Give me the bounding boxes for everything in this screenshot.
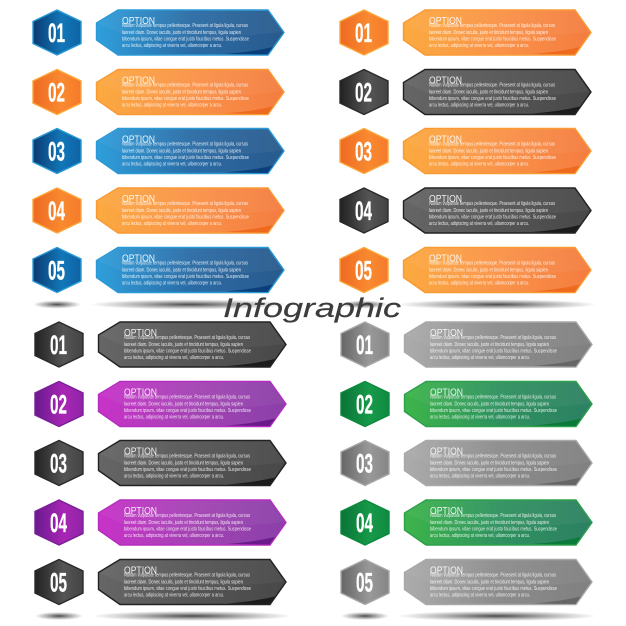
banner 04: Nullam vulputate tempus pellentesque. Praesent at ligula ligula, cursus: [429, 201, 555, 207]
option row: left 01 blue: [33, 10, 284, 55]
banner 04: laoreet diam. Donec iaculis, justo et tincidunt tempus, ligula sapien: [429, 208, 548, 214]
banner 04: [96, 188, 284, 233]
banner 02: OPTION: [429, 74, 462, 86]
banner 05: OPTION: [430, 564, 463, 576]
number badge 05: 05: [50, 568, 67, 598]
banner 03: Nullam vulputate tempus pellentesque. Praesent at ligula ligula, cursus: [429, 142, 555, 148]
shadow: bottom right number: [341, 612, 389, 620]
banner 05: bibendum ipsum, vitae congue erat justo faucibus metus. Suspendisse: [122, 274, 249, 280]
number badge 05: 05: [356, 568, 373, 598]
banner 02: arcu lectus, adipiscing at viverra vel, ullamcorper a arcu.: [124, 414, 224, 420]
number badge 04: [35, 500, 83, 545]
banner 04: arcu lectus, adipiscing at viverra vel, ullamcorper a arcu.: [122, 221, 222, 227]
number badge 03: [33, 128, 81, 174]
banner 02: [98, 382, 286, 426]
shadow: top left number: [33, 300, 81, 308]
banner 01: [98, 322, 286, 367]
banner 03: laoreet diam. Donec iaculis, justo et tincidunt tempus, ligula sapien: [430, 460, 549, 466]
title: Infographic: [223, 293, 402, 323]
banner 05: bibendum ipsum, vitae congue erat justo faucibus metus. Suspendisse: [429, 274, 556, 280]
banner 04: laoreet diam. Donec iaculis, justo et tincidunt tempus, ligula sapien: [122, 208, 241, 214]
banner 05: OPTION: [429, 252, 462, 264]
banner 04: bibendum ipsum, vitae congue erat justo faucibus metus. Suspendisse: [429, 214, 556, 220]
number badge 04: 04: [355, 196, 372, 226]
banner 01: OPTION: [124, 327, 157, 339]
banner 04: [404, 188, 591, 233]
banner 04: OPTION: [429, 193, 462, 205]
banner 01: [96, 10, 284, 55]
banner 03: [404, 440, 592, 486]
banner 01: Nullam vulputate tempus pellentesque. Praesent at ligula ligula, cursus: [429, 23, 555, 29]
banner 03: laoreet diam. Donec iaculis, justo et tincidunt tempus, ligula sapien: [122, 148, 241, 154]
option row: right 05 orange: [340, 248, 591, 292]
banner 04: bibendum ipsum, vitae congue erat justo faucibus metus. Suspendisse: [430, 526, 557, 532]
banner 02: [404, 382, 592, 426]
banner 01: bibendum ipsum, vitae congue erat justo faucibus metus. Suspendisse: [430, 348, 557, 354]
option row: lower left 05 dark: [35, 560, 286, 604]
banner 02: OPTION: [430, 386, 463, 398]
option row: left 02 orange: [33, 70, 284, 114]
banner 02: bibendum ipsum, vitae congue erat justo faucibus metus. Suspendisse: [430, 408, 557, 414]
banner 02: Nullam vulputate tempus pellentesque. Praesent at ligula ligula, cursus: [124, 394, 250, 400]
banner 03: [404, 128, 591, 174]
option row: lower left 04 purple: [35, 500, 286, 545]
banner 05: Nullam vulputate tempus pellentesque. Praesent at ligula ligula, cursus: [122, 260, 248, 266]
banner 01: bibendum ipsum, vitae congue erat justo faucibus metus. Suspendisse: [124, 348, 251, 354]
banner 05: arcu lectus, adipiscing at viverra vel, ullamcorper a arcu.: [122, 280, 222, 286]
banner 03: [96, 128, 284, 174]
number badge 03: [340, 128, 388, 174]
option row: lower right 02 green: [341, 382, 592, 426]
banner 05: laoreet diam. Donec iaculis, justo et tincidunt tempus, ligula sapien: [429, 268, 548, 274]
banner 03: Nullam vulputate tempus pellentesque. Praesent at ligula ligula, cursus: [124, 454, 250, 460]
banner 04: arcu lectus, adipiscing at viverra vel, ullamcorper a arcu.: [429, 221, 529, 227]
banner 04: OPTION: [430, 505, 463, 517]
banner 05: OPTION: [124, 564, 157, 576]
banner 01: Nullam vulputate tempus pellentesque. Praesent at ligula ligula, cursus: [430, 335, 556, 341]
number badge 03: [341, 440, 389, 486]
number badge 02: 02: [50, 390, 67, 420]
banner 01: arcu lectus, adipiscing at viverra vel, ullamcorper a arcu.: [122, 43, 222, 49]
banner 02: bibendum ipsum, vitae congue erat justo faucibus metus. Suspendisse: [429, 96, 556, 102]
banner 05: arcu lectus, adipiscing at viverra vel, ullamcorper a arcu.: [124, 592, 224, 598]
banner 02: Nullam vulputate tempus pellentesque. Praesent at ligula ligula, cursus: [430, 394, 556, 400]
banner 05: bibendum ipsum, vitae congue erat justo faucibus metus. Suspendisse: [430, 586, 557, 592]
option row: lower right 01 grey: [341, 322, 592, 367]
banner 01: Nullam vulputate tempus pellentesque. Praesent at ligula ligula, cursus: [122, 23, 248, 29]
number badge 01: 01: [48, 18, 65, 48]
banner 05: Nullam vulputate tempus pellentesque. Praesent at ligula ligula, cursus: [430, 572, 556, 578]
shadow: bottom right banner: [397, 611, 597, 621]
option row: lower right 05 grey: [341, 560, 592, 604]
banner 03: arcu lectus, adipiscing at viverra vel, ullamcorper a arcu.: [122, 162, 222, 168]
banner 05: bibendum ipsum, vitae congue erat justo faucibus metus. Suspendisse: [124, 586, 251, 592]
banner 04: arcu lectus, adipiscing at viverra vel, ullamcorper a arcu.: [430, 533, 530, 539]
banner 02: OPTION: [122, 74, 155, 86]
banner 03: OPTION: [122, 134, 155, 146]
option row: lower left 01 dark: [35, 322, 286, 367]
banner 02: bibendum ipsum, vitae congue erat justo faucibus metus. Suspendisse: [124, 408, 251, 414]
number badge 04: 04: [50, 508, 67, 538]
option row: lower left 03 dark: [35, 440, 286, 486]
banner 05: [404, 560, 592, 604]
banner 04: arcu lectus, adipiscing at viverra vel, ullamcorper a arcu.: [124, 533, 224, 539]
banner 04: Nullam vulputate tempus pellentesque. Praesent at ligula ligula, cursus: [124, 513, 250, 519]
number badge 01: 01: [355, 18, 372, 48]
banner 01: arcu lectus, adipiscing at viverra vel, ullamcorper a arcu.: [429, 43, 529, 49]
number badge 05: [35, 560, 83, 604]
option row: left 04 orange: [33, 188, 284, 233]
banner 01: laoreet diam. Donec iaculis, justo et tincidunt tempus, ligula sapien: [429, 30, 548, 36]
banner 03: arcu lectus, adipiscing at viverra vel, ullamcorper a arcu.: [430, 474, 530, 480]
banner 05: Nullam vulputate tempus pellentesque. Praesent at ligula ligula, cursus: [429, 260, 555, 266]
banner 04: laoreet diam. Donec iaculis, justo et tincidunt tempus, ligula sapien: [430, 520, 549, 526]
banner 01: OPTION: [430, 327, 463, 339]
number badge 02: 02: [355, 78, 372, 108]
shadow: top right number: [340, 300, 388, 308]
number badge 01: 01: [50, 330, 67, 360]
banner 01: laoreet diam. Donec iaculis, justo et tincidunt tempus, ligula sapien: [430, 342, 549, 348]
number badge 05: 05: [355, 256, 372, 286]
banner 05: arcu lectus, adipiscing at viverra vel, ullamcorper a arcu.: [429, 280, 529, 286]
banner 04: [98, 500, 286, 545]
banner 02: [96, 70, 284, 114]
banner 02: laoreet diam. Donec iaculis, justo et tincidunt tempus, ligula sapien: [122, 90, 241, 96]
banner 02: OPTION: [124, 386, 157, 398]
banner 02: laoreet diam. Donec iaculis, justo et tincidunt tempus, ligula sapien: [429, 90, 548, 96]
banner 03: OPTION: [429, 134, 462, 146]
banner 04: Nullam vulputate tempus pellentesque. Praesent at ligula ligula, cursus: [430, 513, 556, 519]
banner 02: [404, 70, 591, 114]
banner 05: OPTION: [122, 252, 155, 264]
number badge 04: 04: [356, 508, 373, 538]
number badge 01: [341, 322, 389, 367]
banner 05: [96, 248, 284, 292]
banner 02: Nullam vulputate tempus pellentesque. Praesent at ligula ligula, cursus: [122, 82, 248, 88]
option row: lower right 04 green: [341, 500, 592, 545]
banner 04: bibendum ipsum, vitae congue erat justo faucibus metus. Suspendisse: [122, 214, 249, 220]
banner 03: laoreet diam. Donec iaculis, justo et tincidunt tempus, ligula sapien: [429, 148, 548, 154]
banner 01: Nullam vulputate tempus pellentesque. Praesent at ligula ligula, cursus: [124, 335, 250, 341]
banner 03: arcu lectus, adipiscing at viverra vel, ullamcorper a arcu.: [429, 162, 529, 168]
banner 05: [98, 560, 286, 604]
option row: right 02 dark: [340, 70, 591, 114]
number badge 03: 03: [355, 136, 372, 166]
option row: left 05 blue: [33, 248, 284, 292]
banner 02: arcu lectus, adipiscing at viverra vel, ullamcorper a arcu.: [122, 102, 222, 108]
number badge 01: [35, 322, 83, 367]
banner 01: laoreet diam. Donec iaculis, justo et tincidunt tempus, ligula sapien: [122, 30, 241, 36]
number badge 04: [341, 500, 389, 545]
number badge 01: [340, 10, 388, 55]
banner 03: Nullam vulputate tempus pellentesque. Praesent at ligula ligula, cursus: [430, 454, 556, 460]
banner 05: arcu lectus, adipiscing at viverra vel, ullamcorper a arcu.: [430, 592, 530, 598]
banner 02: laoreet diam. Donec iaculis, justo et tincidunt tempus, ligula sapien: [124, 402, 243, 408]
option row: right 04 dark: [340, 188, 591, 233]
banner 03: laoreet diam. Donec iaculis, justo et tincidunt tempus, ligula sapien: [124, 460, 243, 466]
banner 02: arcu lectus, adipiscing at viverra vel, ullamcorper a arcu.: [429, 102, 529, 108]
option row: left 03 blue: [33, 128, 284, 174]
banner 01: arcu lectus, adipiscing at viverra vel, ullamcorper a arcu.: [124, 355, 224, 361]
banner 04: Nullam vulputate tempus pellentesque. Praesent at ligula ligula, cursus: [122, 201, 248, 207]
number badge 02: 02: [48, 78, 65, 108]
number badge 05: [33, 248, 81, 292]
banner 01: OPTION: [429, 15, 462, 27]
number badge 05: 05: [48, 256, 65, 286]
banner 04: OPTION: [122, 193, 155, 205]
banner 05: Nullam vulputate tempus pellentesque. Praesent at ligula ligula, cursus: [124, 572, 250, 578]
number badge 02: [341, 382, 389, 426]
option row: right 01 orange: [340, 10, 591, 55]
number badge 04: 04: [48, 196, 65, 226]
number badge 05: [340, 248, 388, 292]
number badge 02: [33, 70, 81, 114]
shadow: bottom left banner: [92, 611, 292, 621]
number badge 02: [340, 70, 388, 114]
banner 04: [404, 500, 592, 545]
banner 01: arcu lectus, adipiscing at viverra vel, ullamcorper a arcu.: [430, 355, 530, 361]
shadow: bottom left number: [35, 612, 83, 620]
banner 05: laoreet diam. Donec iaculis, justo et tincidunt tempus, ligula sapien: [122, 268, 241, 274]
banner 03: OPTION: [430, 446, 463, 458]
number badge 04: [33, 188, 81, 233]
banner 02: Nullam vulputate tempus pellentesque. Praesent at ligula ligula, cursus: [429, 82, 555, 88]
option row: lower left 02 purple: [35, 382, 286, 426]
banner 03: bibendum ipsum, vitae congue erat justo faucibus metus. Suspendisse: [430, 467, 557, 473]
number badge 03: 03: [356, 448, 373, 478]
banner 01: [404, 322, 592, 367]
banner 05: laoreet diam. Donec iaculis, justo et tincidunt tempus, ligula sapien: [430, 580, 549, 586]
banner 01: bibendum ipsum, vitae congue erat justo faucibus metus. Suspendisse: [122, 36, 249, 42]
number badge 04: [340, 188, 388, 233]
banner 04: laoreet diam. Donec iaculis, justo et tincidunt tempus, ligula sapien: [124, 520, 243, 526]
banner 01: laoreet diam. Donec iaculis, justo et tincidunt tempus, ligula sapien: [124, 342, 243, 348]
shadow: top left banner: [90, 300, 290, 310]
number badge 03: 03: [50, 448, 67, 478]
banner 03: bibendum ipsum, vitae congue erat justo faucibus metus. Suspendisse: [124, 467, 251, 473]
banner 03: arcu lectus, adipiscing at viverra vel, ullamcorper a arcu.: [124, 474, 224, 480]
banner 02: bibendum ipsum, vitae congue erat justo faucibus metus. Suspendisse: [122, 96, 249, 102]
banner 03: [98, 440, 286, 486]
banner 01: [404, 10, 591, 55]
option row: lower right 03 grey: [341, 440, 592, 486]
number badge 01: 01: [356, 330, 373, 360]
number badge 03: [35, 440, 83, 486]
banner 03: OPTION: [124, 446, 157, 458]
banner 05: laoreet diam. Donec iaculis, justo et tincidunt tempus, ligula sapien: [124, 580, 243, 586]
number badge 02: 02: [356, 390, 373, 420]
banner 01: bibendum ipsum, vitae congue erat justo faucibus metus. Suspendisse: [429, 36, 556, 42]
banner 04: bibendum ipsum, vitae congue erat justo faucibus metus. Suspendisse: [124, 526, 251, 532]
number badge 02: [35, 382, 83, 426]
shadow: top right banner: [397, 300, 597, 310]
number badge 05: [341, 560, 389, 604]
banner 02: laoreet diam. Donec iaculis, justo et tincidunt tempus, ligula sapien: [430, 402, 549, 408]
banner 01: OPTION: [122, 15, 155, 27]
banner 03: Nullam vulputate tempus pellentesque. Praesent at ligula ligula, cursus: [122, 142, 248, 148]
option row: right 03 orange: [340, 128, 591, 174]
banner 05: [404, 248, 591, 292]
number badge 01: [33, 10, 81, 55]
banner 02: arcu lectus, adipiscing at viverra vel, ullamcorper a arcu.: [430, 414, 530, 420]
number badge 03: 03: [48, 136, 65, 166]
banner 03: bibendum ipsum, vitae congue erat justo faucibus metus. Suspendisse: [429, 155, 556, 161]
banner 04: OPTION: [124, 505, 157, 517]
banner 03: bibendum ipsum, vitae congue erat justo faucibus metus. Suspendisse: [122, 155, 249, 161]
